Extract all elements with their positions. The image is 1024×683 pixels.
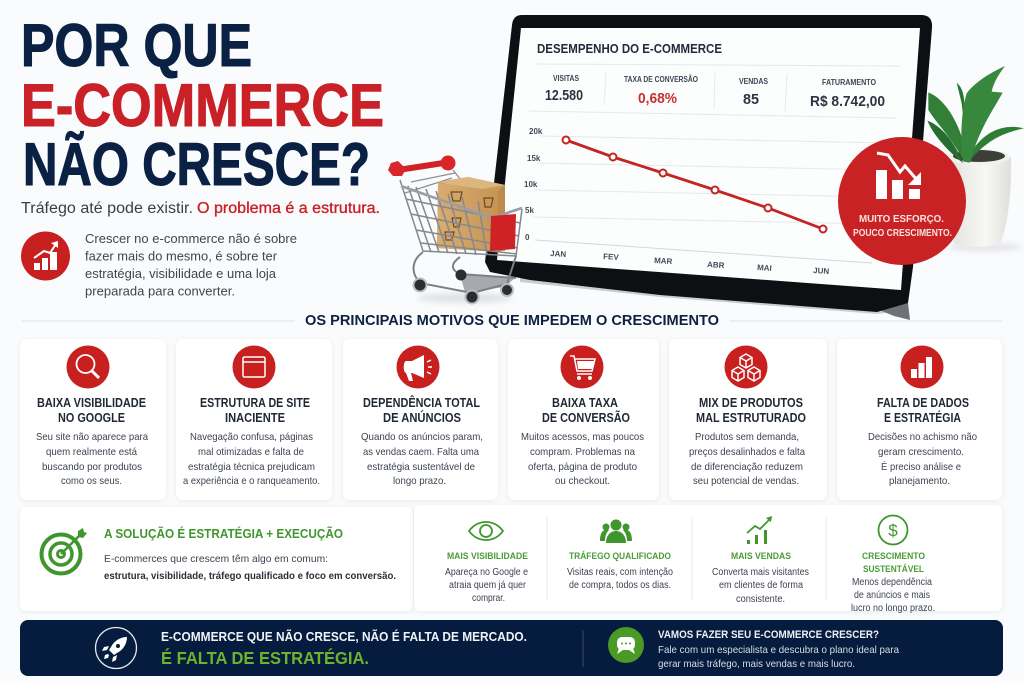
panel: falta de dados: É preciso análise e — [881, 460, 961, 473]
line chart: 20k — [529, 127, 543, 136]
line chart: 5k — [525, 206, 534, 215]
panel: falta de dados: E ESTRATÉGIA — [884, 410, 961, 425]
panel: mix de produtos: de diferenciação reduzem — [691, 461, 803, 473]
title — [21, 12, 384, 198]
benefit: crescimento sustentável: lucro no longo prazo. — [851, 603, 935, 614]
shopping cart — [388, 156, 522, 304]
line chart: 15k — [527, 154, 541, 163]
panel: baixa taxa de conversão: DE CONVERSÃO — [542, 410, 630, 425]
panel: baixa taxa de conversão: ou checkout. — [555, 475, 610, 487]
panel: estrutura de site: ESTRUTURA DE SITE — [200, 396, 310, 410]
benefit: mais vendas: MAIS VENDAS — [731, 551, 791, 561]
benefit: crescimento sustentável: de anúncios e mais — [854, 590, 930, 601]
panel: estrutura de site: mal otimizadas e falta de — [198, 446, 304, 458]
panel: solução: estrutura, visibilidade, tráfego qualificado e foco em conversão. — [104, 570, 396, 582]
laptop screen — [497, 28, 920, 290]
panel: baixa visibilidade — [20, 339, 166, 500]
panel: dependência de anúncios: estratégia sustentável de — [367, 461, 475, 473]
metric: vendas — [739, 77, 769, 108]
panel: baixa visibilidade: BAIXA VISIBILIDADE — [37, 396, 146, 410]
icon: target — [42, 528, 87, 574]
metric: visitas: 12.580 — [545, 87, 583, 104]
section heading: OS PRINCIPAIS MOTIVOS QUE IMPEDEM O CRESCIMENTO — [305, 312, 719, 329]
intro text: estratégia, visibilidade e uma loja — [85, 266, 277, 281]
metric: faturamento — [810, 78, 885, 110]
benefit: mais vendas — [712, 516, 809, 605]
line chart: FEV — [603, 252, 620, 262]
panel: solução: A SOLUÇÃO É ESTRATÉGIA + EXECUÇÃO — [104, 526, 343, 541]
panel: dependência de anúncios: Quando os anúncios param, — [361, 431, 483, 443]
panel: estrutura de site: Navegação confusa, páginas — [190, 431, 313, 443]
line chart: 0 — [525, 233, 530, 242]
banner: É FALTA DE ESTRATÉGIA. — [161, 647, 369, 668]
line chart: JUN — [813, 266, 830, 276]
metric: taxa de conversão: 0,68% — [638, 90, 677, 107]
benefit: tráfego qualificado: de compra, todos os dias. — [569, 580, 671, 591]
line chart: 10k — [524, 180, 538, 189]
intro text — [85, 231, 297, 298]
panel: baixa visibilidade: NO GOOGLE — [58, 411, 125, 425]
benefit: mais vendas: em clientes de forma — [719, 580, 804, 591]
panel: mix de produtos: MIX DE PRODUTOS — [699, 396, 803, 410]
banner: VAMOS FAZER SEU E-COMMERCE CRESCER? — [658, 629, 879, 641]
panel: mix de produtos: MAL ESTRUTURADO — [696, 411, 806, 425]
dashboard title: DESEMPENHO DO E-COMMERCE — [537, 42, 722, 56]
icon: falling bars — [876, 153, 921, 199]
panel: baixa taxa de conversão: oferta, página de produto — [528, 461, 637, 473]
benefit: mais visibilidade: MAIS VISIBILIDADE — [447, 551, 528, 561]
metric: faturamento: R$ 8.742,00 — [810, 93, 885, 110]
title: POR QUE — [21, 12, 252, 79]
icon: megaphone — [396, 346, 440, 388]
panel: estrutura de site: a experiência e o ranqueamento. — [183, 475, 320, 487]
icon: chat — [608, 627, 644, 663]
banner: gerar mais tráfego, mais vendas e mais lucro. — [658, 658, 855, 670]
panel: dependência de anúncios: DEPENDÊNCIA TOTAL — [363, 395, 480, 410]
badge: muito esforço — [838, 137, 966, 265]
panel: solução — [20, 507, 413, 611]
panel: dependência de anúncios — [343, 339, 498, 500]
metric: visitas: VISITAS — [553, 74, 580, 83]
panel: solução: E-commerces que crescem têm algo em comum: — [104, 553, 328, 565]
icon: rocket — [96, 628, 136, 668]
benefit: tráfego qualificado: TRÁFEGO QUALIFICADO — [569, 551, 671, 561]
benefit: crescimento sustentável: $ — [888, 521, 898, 540]
benefit: crescimento sustentável — [851, 516, 935, 614]
panel: falta de dados: Decisões no achismo não — [868, 431, 977, 443]
panel: dependência de anúncios: DE ANÚNCIOS — [383, 410, 461, 425]
panel: baixa visibilidade: buscando por produtos — [42, 461, 142, 473]
panel: mix de produtos: preços desalinhados e falta — [689, 446, 805, 458]
tagline — [21, 200, 380, 217]
benefit: crescimento sustentável: SUSTENTÁVEL — [863, 564, 925, 574]
tagline: O problema é a estrutura. — [197, 200, 380, 217]
banner — [20, 620, 1003, 676]
panel: baixa visibilidade: quem realmente está — [46, 446, 137, 458]
benefit: mais vendas: Converta mais visitantes — [712, 567, 809, 578]
badge: muito esforço: POUCO CRESCIMENTO. — [853, 228, 952, 239]
line chart: ABR — [707, 260, 725, 270]
badge: muito esforço: MUITO ESFORÇO. — [859, 213, 944, 225]
panel: baixa taxa de conversão — [508, 339, 659, 500]
panel: baixa visibilidade: Seu site não aparece para — [36, 431, 148, 443]
panel: estrutura de site: estratégia técnica prejudicam — [188, 461, 315, 473]
panel: dependência de anúncios: longo prazo. — [393, 475, 446, 487]
benefit: tráfego qualificado — [567, 520, 673, 591]
metric: vendas: VENDAS — [739, 77, 769, 86]
panel: benefícios — [414, 505, 1002, 614]
line chart: JAN — [550, 249, 567, 259]
panel: mix de produtos — [669, 339, 827, 500]
intro text: Crescer no e-commerce não é sobre — [85, 231, 297, 246]
panel: baixa taxa de conversão: Muitos acessos, mas poucos — [521, 431, 644, 443]
plant — [927, 66, 1024, 251]
benefit: mais visibilidade — [445, 522, 528, 604]
panel: mix de produtos: Produtos sem demanda, — [695, 431, 799, 443]
metric: taxa de conversão — [624, 75, 698, 107]
benefit: crescimento sustentável: CRESCIMENTO — [862, 551, 925, 561]
benefit: crescimento sustentável: Menos dependência — [852, 577, 932, 588]
intro text: fazer mais do mesmo, é sobre ter — [85, 248, 278, 264]
line chart — [524, 127, 830, 276]
metric: taxa de conversão: TAXA DE CONVERSÃO — [624, 75, 698, 84]
panel: estrutura de site — [176, 339, 332, 500]
metric: vendas: 85 — [743, 91, 759, 108]
panel: baixa visibilidade: como os seus. — [61, 475, 122, 487]
banner: E-COMMERCE QUE NÃO CRESCE, NÃO É FALTA DE MERCADO. — [161, 629, 527, 644]
benefit: mais vendas: consistente. — [736, 594, 785, 605]
panel: falta de dados: geram crescimento. — [878, 446, 964, 458]
title: E-COMMERCE — [21, 72, 384, 139]
laptop — [485, 15, 932, 320]
line chart: MAI — [757, 263, 772, 273]
metric: faturamento: FATURAMENTO — [822, 78, 876, 87]
panel: dependência de anúncios: as vendas caem. Falta uma — [363, 446, 479, 458]
tagline: Tráfego até pode existir. — [21, 200, 193, 217]
panel: falta de dados: planejamento. — [889, 475, 950, 487]
panel: mix de produtos: seu potencial de vendas. — [693, 475, 799, 487]
icon: cubes — [724, 346, 768, 388]
icon: search — [66, 346, 110, 388]
title: NÃO CRESCE? — [23, 131, 370, 198]
panel: estrutura de site: INACIENTE — [225, 411, 285, 425]
panel: baixa taxa de conversão: BAIXA TAXA — [552, 396, 618, 410]
benefit: mais visibilidade: Apareça no Google e — [445, 567, 528, 578]
banner: Fale com um especialista e descubra o plano ideal para — [658, 644, 899, 656]
panel: falta de dados: FALTA DE DADOS — [877, 396, 969, 410]
icon: bars — [900, 346, 944, 388]
icon: cart — [560, 346, 604, 388]
intro text: preparada para converter. — [85, 284, 235, 298]
icon: growth chart — [21, 232, 70, 280]
panel: falta de dados — [837, 339, 1002, 500]
benefit: mais visibilidade: comprar. — [472, 593, 505, 604]
benefit: tráfego qualificado: Visitas reais, com intenção — [567, 567, 673, 578]
line chart: MAR — [654, 256, 673, 266]
panel: baixa taxa de conversão: compram. Problemas na — [530, 446, 635, 458]
benefit: mais visibilidade: atraia quem já quer — [449, 580, 527, 591]
icon: browser window — [232, 346, 276, 388]
metric: visitas — [545, 74, 583, 104]
